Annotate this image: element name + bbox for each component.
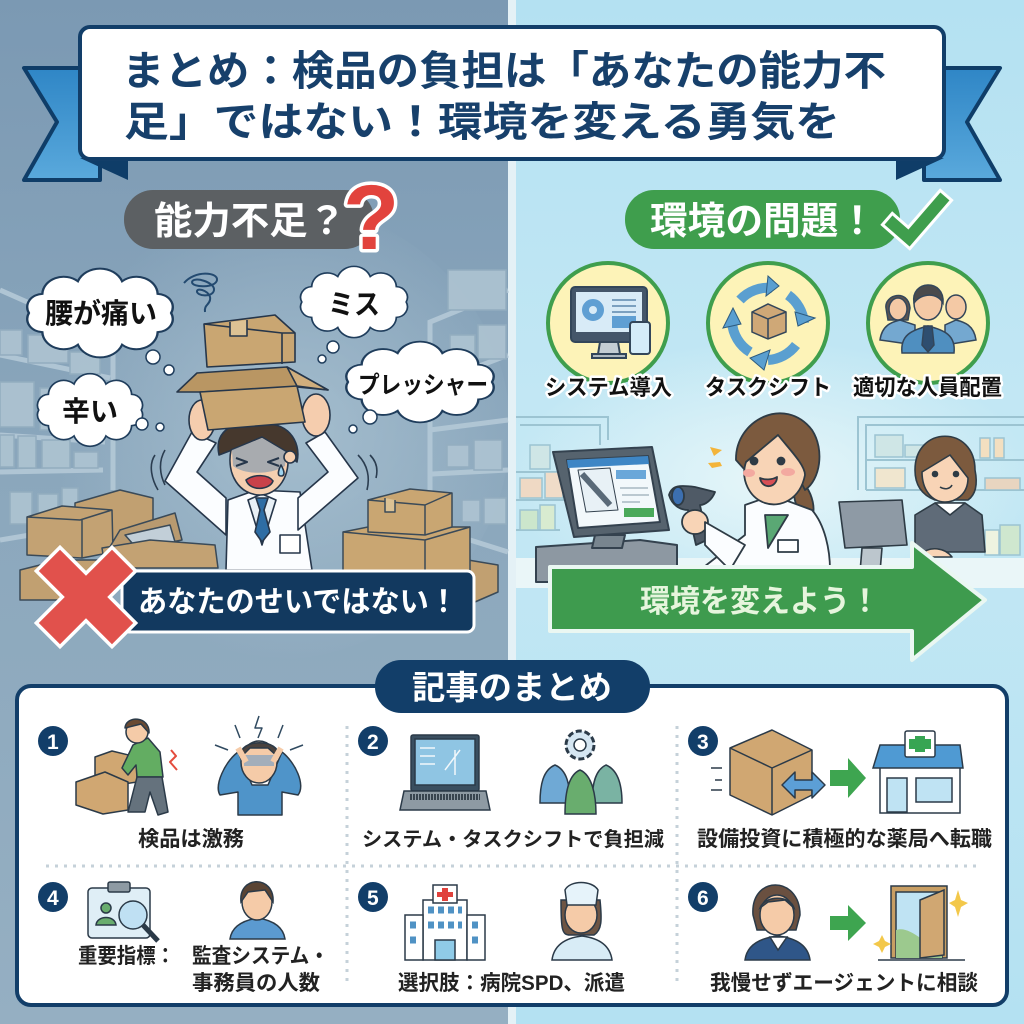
office worker at desk — [839, 436, 985, 572]
item 4: key indicators: 事務員の人数 — [192, 971, 320, 995]
small monitor — [839, 500, 907, 548]
left heading: ability shortage: 能力不足？ — [154, 201, 346, 243]
solution labels: システム導入 — [545, 375, 672, 400]
solution labels: 適切な人員配置 — [853, 375, 1002, 400]
thought bubble: back pain — [27, 269, 174, 375]
item 2: reduce load with systems — [358, 726, 664, 851]
ribbon left tail — [24, 68, 100, 180]
item 6: consult an agent: 6 — [697, 887, 709, 910]
solution: task shift — [708, 263, 828, 383]
arrow: change your environment: 環境を変えよう！ — [640, 584, 880, 619]
item 4: key indicators — [38, 882, 329, 995]
icon: green arrow — [830, 905, 866, 941]
badge — [280, 535, 300, 553]
scanner — [669, 486, 715, 545]
body — [915, 503, 985, 552]
item 6: consult an agent: 我慢せずエージェントに相談 — [710, 972, 978, 995]
solution labels: タスクシフト — [705, 375, 831, 400]
left warehouse shelves — [0, 270, 508, 552]
item 1: inspection is hard: 1 — [47, 731, 59, 754]
heading tab — [375, 660, 650, 713]
item 1: inspection is hard: 検品は激務 — [138, 828, 244, 851]
cheeks — [743, 469, 755, 477]
thought bubble: pressure — [346, 342, 494, 433]
icon: clipboard with magnifier — [88, 882, 158, 941]
hair — [218, 423, 298, 462]
item 2: reduce load with systems: システム・タスクシフトで負担減 — [362, 827, 664, 851]
item 4: key indicators: 監査システム・ — [192, 945, 329, 968]
ribbon fold shadows — [80, 158, 944, 180]
solution labels — [545, 375, 1002, 400]
right heading: environment problem — [625, 190, 941, 249]
counter — [516, 558, 1024, 588]
open box back flaps — [177, 367, 328, 392]
left arm — [165, 432, 226, 535]
item 5: options: 5 — [367, 887, 379, 910]
icon: cycling arrows and box — [732, 288, 804, 360]
top box — [204, 315, 295, 367]
title text: まとめ：検品の負担は「あなたの能力不 — [122, 48, 886, 94]
item 6: consult an agent — [688, 882, 978, 995]
hands — [189, 400, 215, 440]
item 4: key indicators: 重要指標： — [78, 945, 175, 968]
icon: green arrow — [830, 758, 866, 798]
coat — [700, 498, 830, 570]
title box — [80, 27, 944, 159]
title text: 足」ではない！環境を変える勇気を — [124, 99, 840, 145]
ribbon right tail — [924, 68, 1000, 180]
item 4: key indicators: 4 — [47, 887, 59, 910]
pile of boxes: right floor — [343, 489, 498, 605]
icon: nurse — [552, 882, 612, 960]
shake lines — [151, 450, 377, 490]
item 5: options — [358, 882, 625, 995]
title text — [122, 48, 886, 145]
arrow: change your environment — [550, 543, 985, 660]
item 5: options: 選択肢：病院SPD、派遣 — [398, 972, 625, 995]
background: left gray-blue side — [0, 0, 510, 1024]
icon: check mark — [893, 201, 941, 238]
banner: not your fault: あなたのせいではない！ — [138, 586, 458, 619]
item 2: reduce load with systems: 2 — [367, 731, 379, 754]
icon: red question mark: ? — [343, 167, 399, 269]
face — [744, 435, 805, 504]
thought bubble: tough: 辛い — [62, 396, 118, 427]
icon: pharmacy shop — [873, 731, 963, 813]
icon: box with exchange arrow — [711, 730, 825, 815]
item 3: move to investing pharmacy: 3 — [697, 731, 709, 754]
thought bubble: back pain: 腰が痛い — [45, 297, 157, 329]
icon: head in hands — [215, 716, 303, 815]
icon: agent with headset — [745, 885, 810, 960]
sparkles — [708, 447, 722, 468]
icon: group of staff — [880, 285, 976, 353]
icon: person lifting boxes — [76, 719, 177, 815]
panel: article summary: 記事のまとめ — [412, 669, 612, 706]
item 1: inspection is hard — [38, 716, 303, 851]
solution: system introduction — [548, 263, 668, 383]
item 3: move to investing pharmacy: 設備投資に積極的な薬局へ転職 — [697, 828, 992, 851]
item 3: move to investing pharmacy — [688, 726, 992, 851]
thought bubble: mistakes: ミス — [328, 289, 380, 320]
pile of boxes: left floor — [20, 490, 218, 600]
icon: laptop — [400, 735, 490, 810]
icon: hospital — [405, 885, 485, 960]
icon: desktop and phone — [571, 287, 650, 358]
open box front — [200, 386, 305, 430]
face — [230, 437, 288, 495]
icon: dizzy spiral — [184, 274, 217, 312]
title banner — [24, 27, 1000, 180]
hand — [682, 510, 708, 534]
face — [922, 455, 968, 502]
shirt and tie — [248, 494, 276, 545]
hand — [920, 549, 952, 557]
icon: staff person — [230, 882, 285, 939]
right arm — [298, 432, 358, 530]
left heading: ability shortage — [124, 167, 399, 269]
ponytail — [793, 475, 814, 525]
right heading: environment problem: 環境の問題！ — [650, 201, 876, 243]
hair — [915, 436, 976, 500]
hair — [736, 413, 819, 490]
thought bubble: tough — [37, 374, 164, 446]
banner: not your fault — [122, 571, 474, 632]
background: right light-blue side — [508, 0, 1024, 1024]
stressed pharmacist carrying boxes — [165, 315, 358, 570]
sweat drop — [278, 465, 284, 476]
register and touch screen — [536, 447, 677, 582]
panel: article summary — [17, 660, 1007, 1005]
pharmacy shelves — [516, 417, 1024, 555]
thought bubble: pressure: プレッシャー — [358, 372, 488, 399]
solution: staffing — [868, 263, 988, 383]
lab coat — [226, 490, 312, 570]
icon: open door — [873, 886, 968, 960]
thought bubble: mistakes — [301, 266, 407, 363]
icon: team with gear — [540, 731, 622, 814]
eyes and mouth — [236, 458, 279, 466]
smiling pharmacist with scanner — [669, 413, 830, 570]
icon: red cross — [60, 571, 112, 623]
